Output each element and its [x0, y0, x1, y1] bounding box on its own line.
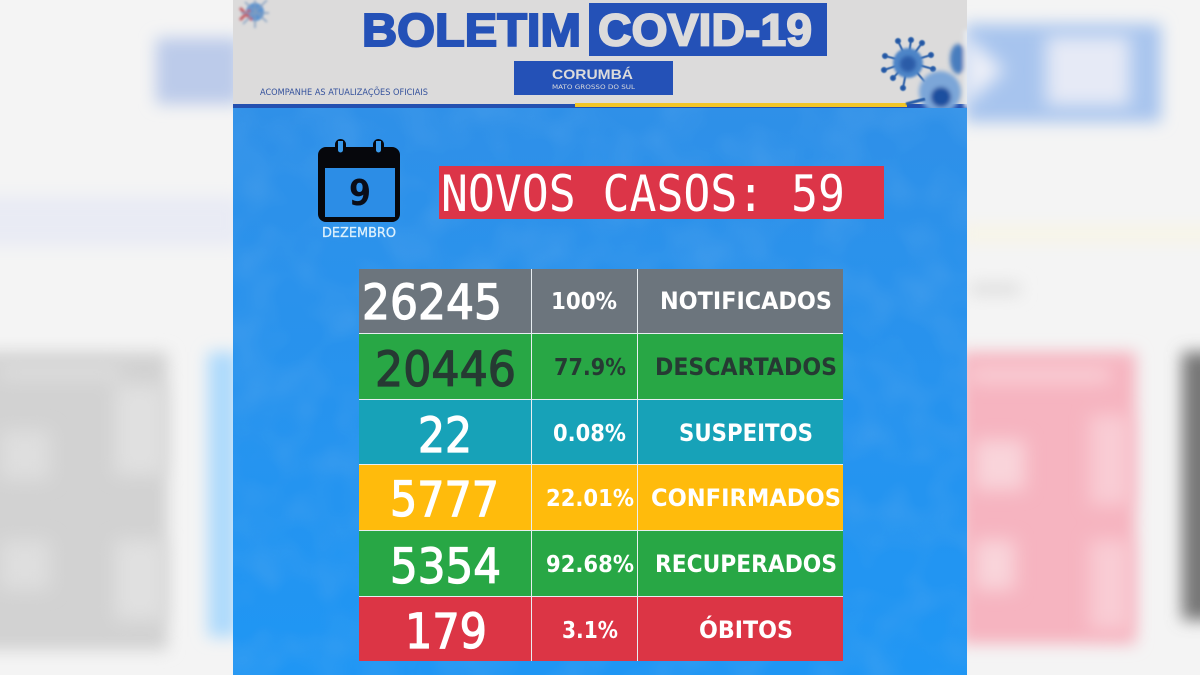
row: recuperados: RECUPERADOS: [655, 550, 837, 578]
blue poster background: [233, 104, 967, 675]
row: suspeitos: 0.08%: [553, 421, 626, 447]
row: obitos: ÓBITOS: [699, 614, 793, 644]
location badge: Corumbá: MATO GROSSO DO SUL: [552, 84, 636, 91]
icon: calendar: [318, 139, 400, 222]
row: obitos: [405, 604, 793, 660]
row: confirmados: 5777: [390, 472, 499, 528]
row: confirmados: 22.01%: [546, 486, 634, 512]
calendar day: 9: [349, 173, 371, 214]
header band: [233, 0, 967, 108]
calendar month: DEZEMBRO: [322, 226, 396, 241]
row: confirmados: CONFIRMADOS: [651, 484, 841, 512]
icon: virus cluster top right: [882, 30, 970, 113]
location badge: Corumbá: CORUMBÁ: [552, 66, 633, 82]
row: descartados: [375, 342, 837, 398]
row: obitos: 179: [405, 604, 487, 660]
row: recuperados: 5354: [390, 539, 501, 595]
callout: new cases: NOVOS CASOS: 59: [441, 165, 845, 223]
title: COVID-19: COVID-19: [598, 4, 812, 56]
icon: virus top left: [240, 0, 269, 28]
row: obitos: 3.1%: [562, 618, 618, 644]
row: notificados: NOTIFICADOS: [660, 287, 832, 315]
row: descartados: 20446: [375, 342, 516, 398]
row: recuperados: [390, 539, 837, 595]
row: notificados: [362, 275, 832, 331]
row: recuperados: 92.68%: [546, 552, 634, 578]
location badge: Corumbá: [514, 61, 673, 95]
row: notificados: 100%: [551, 289, 617, 315]
row: notificados: 26245: [362, 275, 502, 331]
row: descartados: 77.9%: [554, 355, 626, 381]
row: descartados: DESCARTADOS: [655, 353, 837, 381]
row: confirmados: [390, 472, 841, 528]
row: suspeitos: [418, 408, 813, 464]
subtitle: follow updates: ACOMPANHE AS ATUALIZAÇÕES OFICIAIS: [260, 86, 428, 98]
row: suspeitos: SUSPEITOS: [679, 419, 813, 447]
title: BOLETIM: BOLETIM: [362, 4, 581, 56]
row: suspeitos: 22: [418, 408, 472, 464]
statistics table: [359, 269, 843, 661]
